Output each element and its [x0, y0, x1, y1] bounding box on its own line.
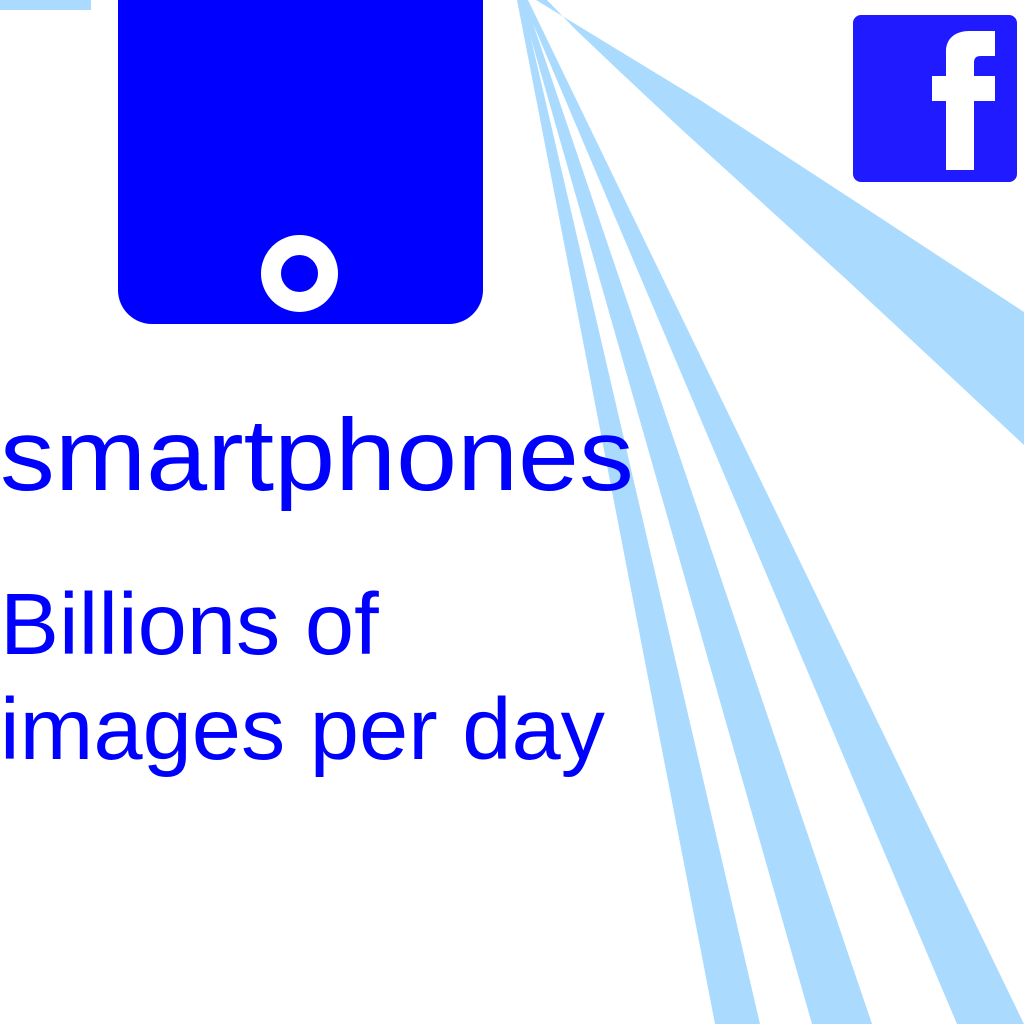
icon: smartphone — [118, 0, 483, 324]
top-left bar — [0, 0, 91, 10]
text: billions of images per day: images per day — [0, 681, 605, 778]
ray 2 — [520, 0, 872, 1024]
text: billions of images per day — [0, 576, 605, 778]
ray 1 — [517, 0, 760, 1024]
icon: home button — [261, 235, 338, 312]
heading: smartphones: smartphones — [0, 398, 634, 512]
text: billions of images per day: Billions of — [0, 576, 379, 673]
ray to the right edge — [536, 0, 1024, 445]
icon: facebook — [853, 15, 1017, 182]
ray 3 — [523, 0, 1024, 1024]
